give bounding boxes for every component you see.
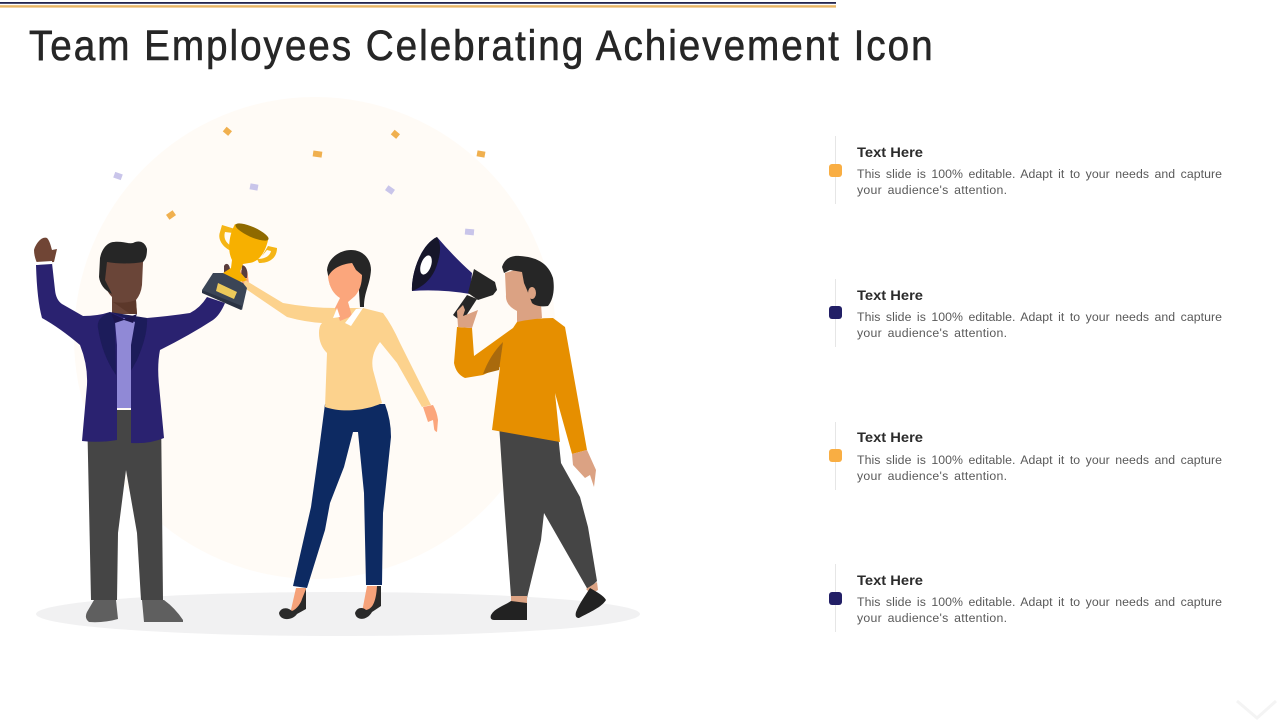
shoes: [491, 588, 606, 620]
bell: [412, 237, 472, 294]
title: Team Employees Celebrating Achievement Icon: [29, 21, 933, 69]
hands: [240, 268, 438, 432]
list item 2: [829, 279, 1222, 347]
body 4: This slide is 100% editable. Adapt it to your needs and capture: [857, 595, 1222, 609]
bell highlight: [418, 254, 434, 276]
heading 2: Text Here: [857, 287, 923, 303]
figure: man with trophy: [34, 238, 225, 622]
plate: [216, 283, 237, 299]
face: [328, 263, 362, 321]
neck and head: [505, 268, 542, 324]
hair: [502, 256, 554, 306]
trousers: [293, 404, 391, 588]
sleeve hand: [572, 450, 596, 487]
confetti: [113, 127, 485, 235]
hair: [99, 241, 147, 294]
collar: [333, 308, 363, 326]
sleeve fold: [483, 342, 503, 374]
gripping hand: [457, 305, 478, 328]
base: [202, 273, 247, 310]
bullet 4: [829, 592, 842, 605]
cuff: [36, 261, 52, 265]
list item 3: [829, 422, 1222, 490]
icon: faint corner chevron: [1237, 701, 1276, 718]
cup rim: [234, 220, 270, 244]
top accent bars: [0, 2, 836, 8]
hair: [327, 250, 371, 307]
body 3: This slide is 100% editable. Adapt it to your needs and capture: [857, 453, 1222, 467]
raised hand: [34, 238, 57, 263]
body 1: your audience's attention.: [857, 183, 1007, 197]
body: [468, 269, 497, 300]
cup and stem: [223, 224, 268, 282]
heading 3: Text Here: [857, 429, 923, 445]
sweater and raised arm: [243, 280, 431, 410]
feet: [290, 586, 379, 614]
megaphone: [412, 237, 497, 328]
shirt: [115, 318, 135, 408]
bell inner: [412, 237, 440, 291]
background circle: [74, 97, 556, 579]
trousers: [499, 424, 597, 598]
body 4: your audience's attention.: [857, 611, 1007, 625]
body 2: your audience's attention.: [857, 326, 1007, 340]
shoes: [279, 586, 381, 619]
neck and face: [105, 262, 143, 314]
list item 4: [829, 564, 1222, 632]
jacket: [36, 263, 225, 443]
handle: [453, 295, 477, 322]
trophy: [202, 220, 277, 310]
lapels: [98, 312, 147, 375]
body 2: This slide is 100% editable. Adapt it to your needs and capture: [857, 310, 1222, 324]
ground shadow: [36, 592, 640, 636]
trousers: [87, 410, 163, 600]
figure: man with megaphone: [412, 237, 606, 620]
ankles: [511, 582, 598, 604]
bullet 2: [829, 306, 842, 319]
heading 1: Text Here: [857, 144, 923, 160]
bullet 1: [829, 164, 842, 177]
heading 4: Text Here: [857, 572, 923, 588]
list item 1: [829, 136, 1222, 204]
supporting hand: [224, 264, 247, 278]
bow tie: [111, 313, 137, 323]
shoes: [86, 600, 183, 622]
figure: woman: [240, 250, 438, 619]
bullet 3: [829, 449, 842, 462]
sweater: [454, 318, 587, 454]
body 3: your audience's attention.: [857, 469, 1007, 483]
body 1: This slide is 100% editable. Adapt it to your needs and capture: [857, 167, 1222, 181]
handles: [219, 225, 235, 252]
ear: [528, 287, 536, 299]
